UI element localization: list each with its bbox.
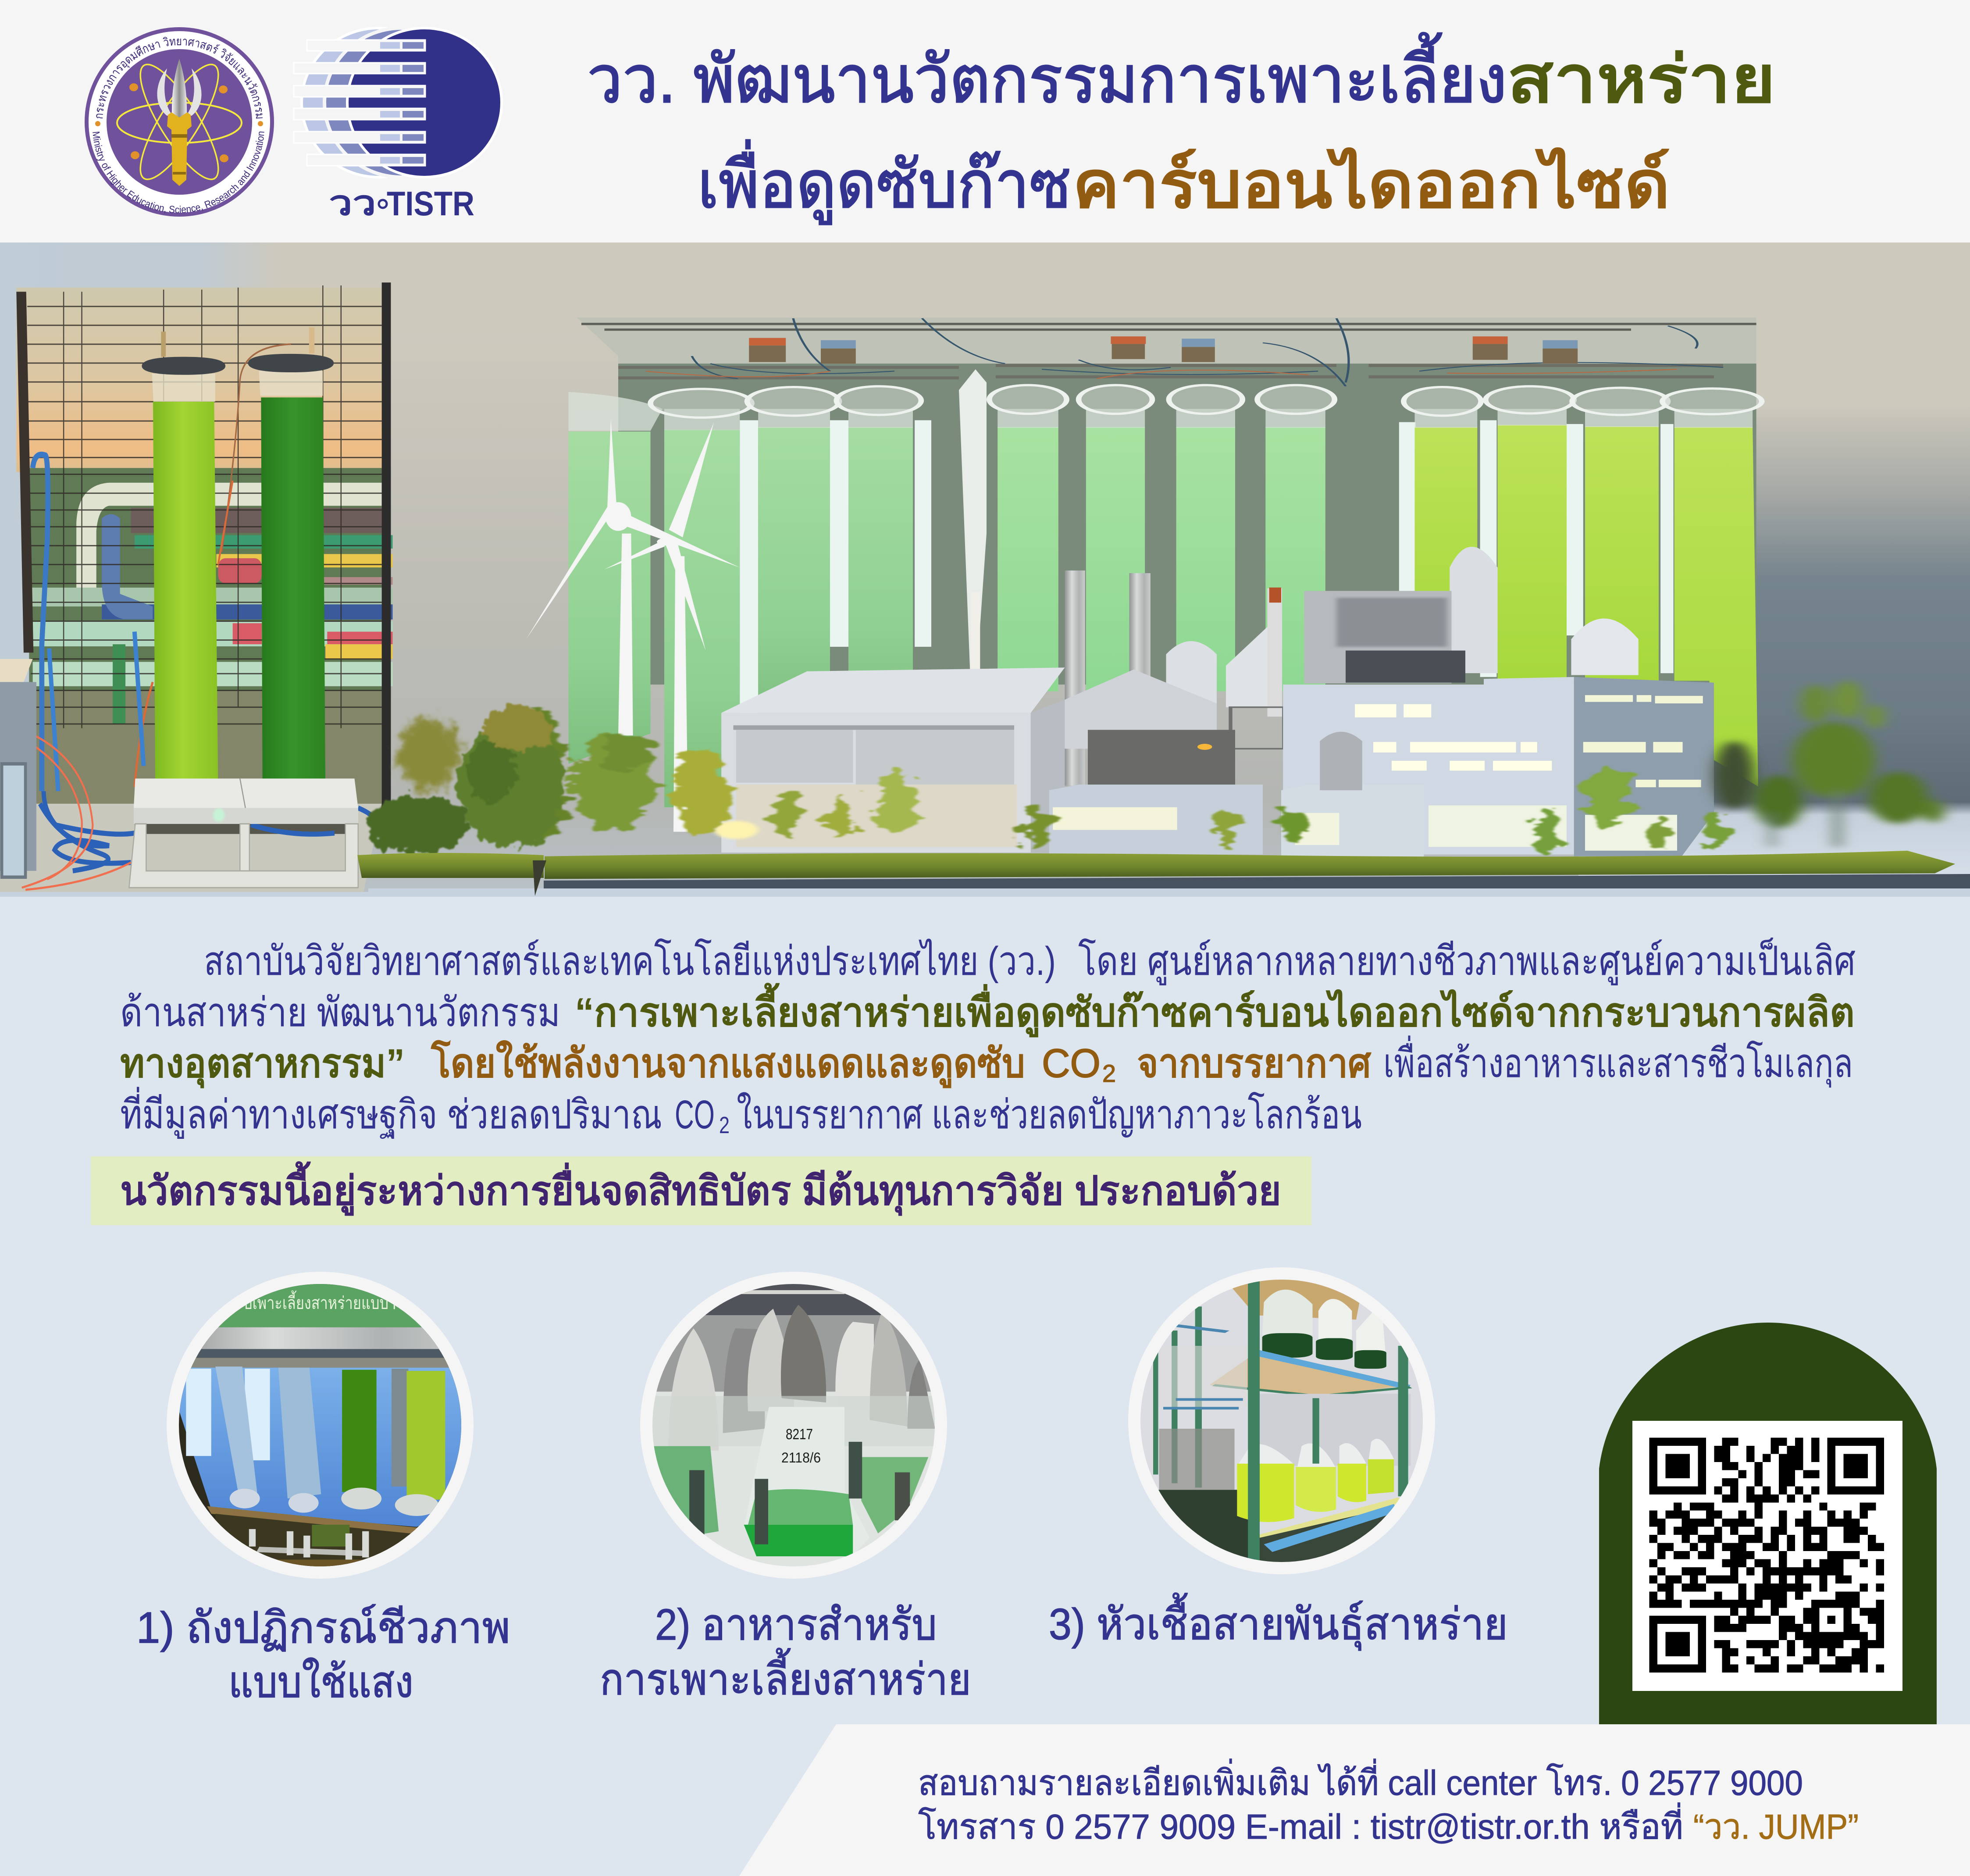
grass strip [545, 851, 1955, 879]
caption 1 [136, 1603, 510, 1707]
hero banner [0, 243, 1970, 897]
intro paragraph: สถาบันวิจัยวิทยาศาสตร์และเทคโนโลยีแห่งประเทศไทย (วว.) [204, 938, 1056, 984]
logo: TISTR: TISTR [387, 184, 474, 223]
trees left [502, 707, 1726, 852]
illustration: photobioreactor factory [502, 317, 1955, 879]
title: สาหร่าย [1507, 43, 1776, 116]
tube group: pale green [997, 427, 1325, 691]
intro paragraph: 2 [1102, 1059, 1116, 1087]
caption 1: แบบใช้แสง [228, 1658, 413, 1707]
base strip [0, 860, 1970, 897]
column: dark green [248, 328, 337, 797]
photo 2: 2118/6 [781, 1450, 821, 1466]
caption 2: 2) อาหารสำหรับ [655, 1600, 937, 1649]
header band [0, 0, 1970, 243]
photo 1: บเพาะเลี้ยงสาหร่ายแบบ F [243, 1290, 401, 1313]
intro paragraph: ในบรรยากาศ และช่วยลดปัญหาภาวะโลกร้อน [737, 1092, 1362, 1138]
panel: algae strain seed cultures [1128, 1267, 1440, 1574]
process plant [714, 547, 1714, 858]
logo: ministry seal [85, 27, 274, 217]
intro paragraph: CO [675, 1092, 715, 1137]
logo: TISTR [294, 28, 502, 223]
grass strip left [357, 853, 544, 878]
footer panel [739, 1724, 1970, 1876]
intro paragraph: จากบรรยากาศ [1137, 1041, 1372, 1086]
captions [136, 1593, 1508, 1707]
fluorescent lights [740, 420, 1674, 790]
glass tube bodies [569, 392, 1753, 431]
trees near photo [366, 705, 563, 854]
silos and stacks [971, 547, 1639, 786]
intro paragraph: ทางอุตสาหกรรม” [120, 1041, 405, 1088]
tube group: mint [569, 427, 913, 807]
panel: culture media [640, 1272, 947, 1579]
contact text: โทรสาร 0 2577 9009 E-mail : tistr@tistr.or.th หรือที่ [918, 1803, 1683, 1846]
low buildings [1049, 732, 1424, 858]
highlight bar: นวัตกรรมนี้อยู่ระหว่างการยื่นจดสิทธิบัตร มีต้นทุนการวิจัย ประกอบด้วย [120, 1161, 1281, 1216]
photo 3 [1129, 1276, 1440, 1566]
intro paragraph: “การเพาะเลี้ยงสาหร่ายเพื่อดูดซับก๊าซคาร์บอนไดออกไซด์จากกระบวนการผลิต [575, 983, 1855, 1038]
title [587, 32, 1776, 225]
panel: photobioreactor [165, 1272, 475, 1579]
title: เพื่อดูดซับก๊าซ [698, 140, 1071, 225]
intro paragraph: ที่มีมูลค่าทางเศรษฐกิจ ช่วยลดปริมาณ [120, 1087, 662, 1139]
intro paragraph: 2 [719, 1112, 730, 1138]
reactor stand [129, 778, 358, 888]
qr panel [1599, 1323, 1937, 1724]
office block [1283, 677, 1714, 856]
title: คาร์บอนไดออกไซด์ [1072, 147, 1670, 221]
contact text: “วว. JUMP” [1693, 1807, 1859, 1846]
contact text: สอบถามรายละเอียดเพิ่มเติม ได้ที่ call center โทร. 0 2577 9000 [918, 1759, 1803, 1802]
photo 2 [643, 1283, 945, 1570]
intro paragraph: ด้านสาหร่าย พัฒนานวัตกรรม [120, 990, 560, 1035]
caption 1: 1) ถังปฏิกรณ์ชีวภาพ [136, 1603, 510, 1652]
intro paragraph: CO [1042, 1041, 1101, 1086]
wind turbines [526, 419, 740, 832]
photo: outdoor algae photobioreactor columns [0, 282, 393, 892]
logo: ministry seal: กระทรวงการอุดมศึกษา วิทยาศาสตร์ วิจัยและนวัตกรรม [92, 35, 267, 120]
main hall [714, 667, 1315, 852]
tube group: lime [1414, 425, 1758, 786]
photo 2: 8217 [786, 1426, 813, 1443]
intro paragraph [120, 937, 1856, 1139]
rack and pipes [577, 317, 1756, 685]
left cabinet [0, 659, 36, 877]
caption 2 [600, 1600, 971, 1704]
caption 3: 3) หัวเชื้อสายพันธุ์สาหร่าย [1049, 1593, 1508, 1651]
trees right [1714, 681, 1944, 847]
intro paragraph: โดยใช้พลังงานจากแสงแดดและดูดซับ [431, 1040, 1025, 1088]
caption 2: การเพาะเลี้ยงสาหร่าย [600, 1648, 971, 1704]
glass tube rims [651, 385, 1762, 417]
contact text [918, 1759, 1859, 1846]
qr code [1649, 1438, 1884, 1673]
logo: ministry seal: Ministry of Higher Education, Science, Research and Innovation [90, 131, 267, 215]
intro paragraph: เพื่อสร้างอาหารและสารชีวโมเลกุล [1383, 1035, 1853, 1088]
title: วว. พัฒนานวัตกรรมการเพาะเลี้ยง [587, 32, 1507, 116]
photo 1 [179, 1284, 461, 1566]
logo: TISTR: วว [329, 184, 376, 222]
highlight bar [91, 1156, 1311, 1225]
column: light green [142, 332, 229, 796]
